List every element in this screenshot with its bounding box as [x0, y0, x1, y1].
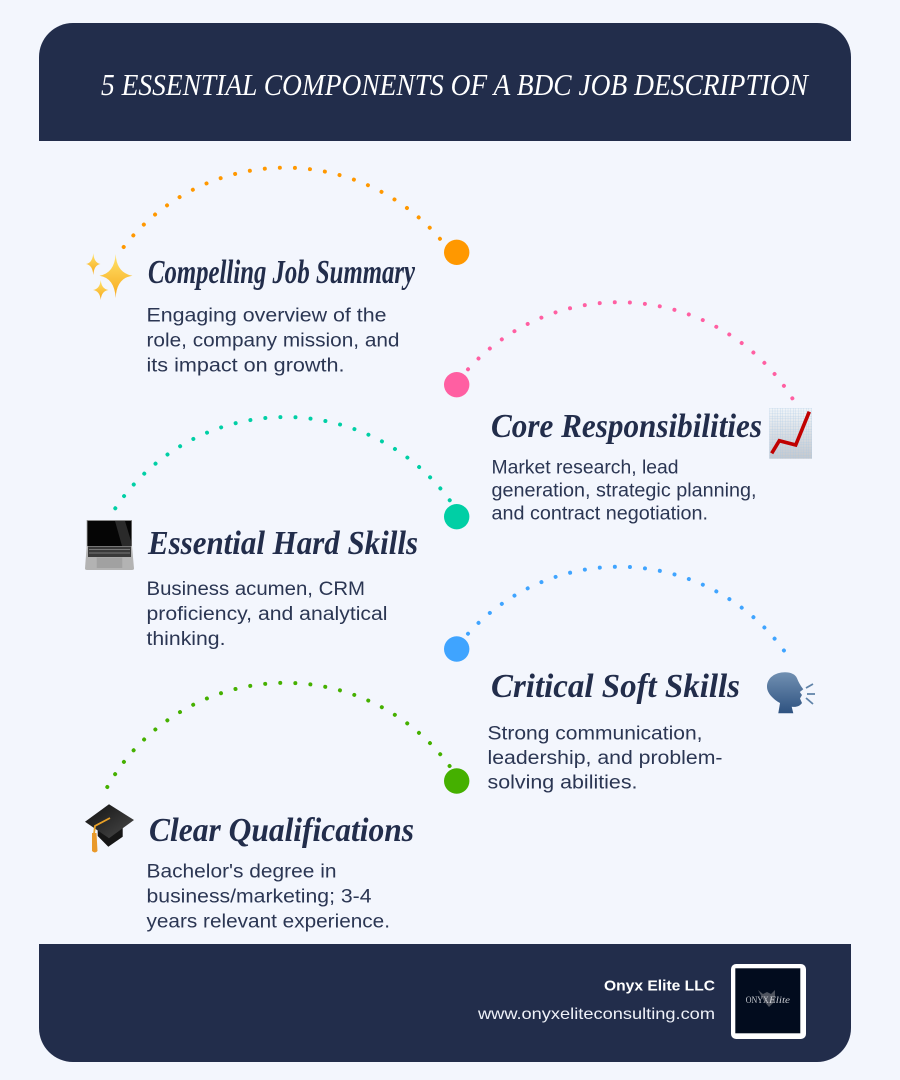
description: generation, strategic planning, — [492, 480, 756, 502]
description — [488, 723, 722, 793]
description: proficiency, and analytical — [146, 604, 388, 625]
node: teal — [444, 504, 469, 529]
description: solving abilities. — [488, 772, 638, 793]
heading: Core Responsibilities — [491, 408, 762, 445]
icon: graduation cap — [85, 804, 134, 852]
header banner — [39, 23, 851, 141]
description — [146, 579, 388, 650]
heading: Essential Hard Skills — [147, 525, 418, 562]
description — [146, 861, 390, 932]
heading: Critical Soft Skills — [491, 668, 740, 705]
panel: compelling job summary — [86, 168, 469, 376]
logo — [731, 964, 806, 1039]
description: Bachelor's degree in — [146, 861, 336, 882]
heading: Clear Qualifications — [149, 812, 414, 849]
icon: sparkles — [86, 253, 132, 300]
panel: critical soft skills — [444, 567, 815, 793]
description: leadership, and problem- — [488, 748, 722, 769]
dotted arc: orange — [124, 168, 441, 247]
icon: chart — [769, 408, 812, 459]
dotted arc: teal — [115, 417, 451, 508]
description — [492, 457, 756, 524]
description: its impact on growth. — [146, 356, 344, 376]
dotted arc: green — [107, 683, 451, 787]
dotted arc: pink — [468, 302, 794, 401]
description: years relevant experience. — [146, 911, 390, 932]
panel: clear qualifications — [85, 683, 469, 932]
logo: ONYX — [746, 995, 769, 1005]
dotted arc: blue — [468, 567, 785, 652]
description: Business acumen, CRM — [146, 579, 365, 600]
company name: Onyx Elite LLC — [604, 978, 715, 995]
node: pink — [444, 372, 469, 397]
icon: speaking head — [767, 672, 815, 713]
icon: laptop — [85, 520, 134, 570]
description: Engaging overview of the — [146, 306, 386, 326]
panel: essential hard skills — [85, 417, 469, 650]
footer banner — [39, 944, 851, 1062]
node: blue — [444, 636, 469, 662]
description: role, company mission, and — [146, 330, 400, 352]
website: www.onyxeliteconsulting.com — [477, 1006, 715, 1023]
panel: core responsibilities — [444, 302, 812, 524]
description: and contract negotiation. — [492, 503, 708, 524]
description: Strong communication, — [488, 723, 702, 744]
node: orange — [444, 240, 469, 265]
logo: Elite — [768, 995, 790, 1005]
description: thinking. — [146, 629, 226, 650]
description: business/marketing; 3-4 — [146, 886, 372, 907]
title: 5 ESSENTIAL COMPONENTS OF A BDC JOB DESCRIPTION — [101, 67, 810, 102]
description — [146, 306, 400, 376]
description: Market research, lead — [492, 457, 678, 478]
heading: Compelling Job Summary — [148, 254, 416, 291]
node: green — [444, 768, 469, 794]
